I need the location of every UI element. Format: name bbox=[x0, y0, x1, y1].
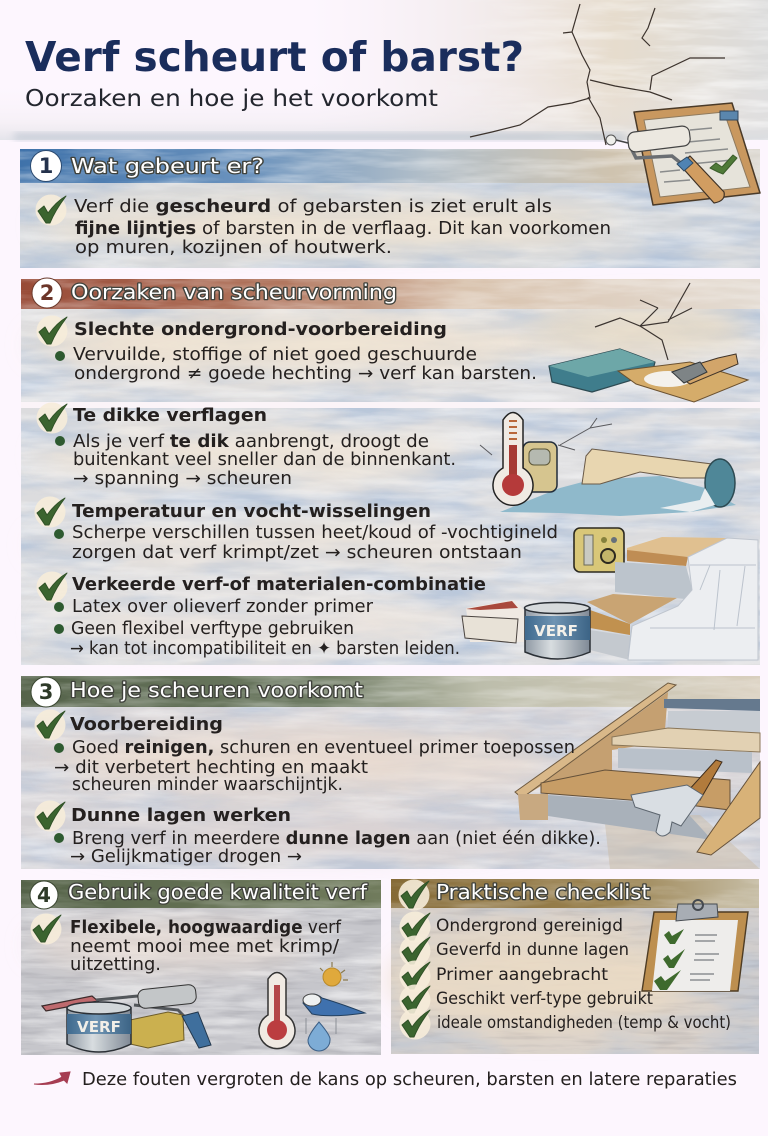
cause 3: temperatuur en vocht: zorgen dat verf krimpt/zet → scheuren ontstaan bbox=[72, 543, 522, 563]
checklist items: Ondergrond gereinigd bbox=[436, 916, 623, 935]
cause 1: slechte ondergrond: Slechte ondergrond-voorbereiding bbox=[74, 320, 447, 340]
cause 4: verkeerde materialen: Verkeerde verf-of materialen-combinatie bbox=[72, 575, 486, 595]
cause 1: slechte ondergrond: Vervuilde, stoffige of niet goed geschuurde bbox=[73, 345, 477, 365]
cause 3: temperatuur en vocht: Scherpe verschillen tussen heet/koud of -vochtigineld bbox=[72, 523, 558, 543]
panel 1: wat gebeurt er bbox=[20, 103, 760, 268]
cause 4: verkeerde materialen: → kan tot incompatibiliteit en ✦ barsten leiden. bbox=[70, 639, 460, 659]
heading 1: Wat gebeurt er? bbox=[71, 154, 264, 178]
icon: hygrometer bbox=[574, 528, 624, 572]
icon: stairs with drop cloth bbox=[587, 537, 758, 660]
flexible paint text: uitzetting. bbox=[70, 955, 161, 975]
icon: stairs with paint brush bbox=[515, 683, 760, 869]
number badge 4 bbox=[30, 881, 58, 909]
cause 1: slechte ondergrond: ondergrond ≠ goede hechting → verf kan barsten. bbox=[74, 364, 537, 384]
checklist badge bbox=[398, 880, 430, 910]
tip 2: dunne lagen: Dunne lagen werken bbox=[71, 806, 291, 826]
flexible paint text: neemt mooi mee met krimp/ bbox=[70, 937, 339, 957]
icon: clipboard with checks bbox=[642, 900, 748, 991]
footer note bbox=[34, 1070, 737, 1090]
icon: primer box and verf can bbox=[462, 600, 590, 659]
icon: thermometer, device, roll and spill bbox=[480, 412, 736, 516]
body text: fijne lijntjes of barsten in de verflaag. Dit kan voorkomen bbox=[75, 219, 611, 239]
heading 3: Hoe je scheuren voorkomt bbox=[70, 678, 363, 702]
flexible paint text bbox=[70, 918, 342, 975]
icon: thermometer and weather bbox=[259, 962, 365, 1051]
body text: op muren, kozijnen of houtwerk. bbox=[75, 238, 392, 258]
number badge 2 bbox=[32, 278, 62, 308]
title: Verf scheurt of barst? bbox=[25, 33, 524, 81]
tip 2: dunne lagen bbox=[34, 800, 601, 867]
checklist items bbox=[400, 912, 731, 1040]
tip 1: voorbereiding: Voorbereiding bbox=[70, 715, 223, 735]
header wash with cracks bbox=[0, 0, 768, 145]
number badge 3 bbox=[31, 677, 61, 707]
number badge 3: 3 bbox=[39, 680, 53, 704]
panel 3: hoe je scheuren voorkomt bbox=[21, 676, 760, 869]
flexible paint text: Flexibele, hoogwaardige verf bbox=[70, 918, 342, 938]
icon: can, roller and sponge bbox=[42, 984, 211, 1052]
tip 1: voorbereiding: → dit verbetert hechting en maakt bbox=[54, 758, 368, 778]
heading 4: Gebruik goede kwaliteit verf bbox=[68, 880, 368, 904]
check icon bbox=[30, 914, 62, 944]
checklist heading: Praktische checklist bbox=[436, 880, 650, 904]
checklist items: Geverfd in dunne lagen bbox=[436, 940, 629, 959]
check icon bbox=[36, 194, 66, 226]
body text: Verf die gescheurd of gebarsten is ziet erult als bbox=[74, 197, 552, 217]
body text bbox=[74, 197, 611, 258]
tip 1: voorbereiding: Goed reinigen, schuren en eventueel primer toepossen bbox=[72, 738, 575, 758]
checklist items: Geschikt verf-type gebruikt bbox=[436, 989, 654, 1008]
cause 2: te dikke verflagen: → spanning → scheuren bbox=[73, 469, 292, 489]
cause 4: verkeerde materialen: Geen flexibel verftype gebruiken bbox=[71, 619, 354, 639]
icon: clipboard and paint roller bbox=[606, 103, 760, 205]
subtitle: Oorzaken en hoe je het voorkomt bbox=[25, 86, 438, 112]
panel 2: oorzaken bbox=[21, 278, 760, 665]
number badge 2: 2 bbox=[40, 281, 54, 305]
cause 4: verkeerde materialen bbox=[36, 572, 486, 659]
arrow bbox=[34, 1072, 70, 1084]
tip 1: voorbereiding bbox=[34, 710, 575, 795]
cause 3: temperatuur en vocht: Temperatuur en vocht-wisselingen bbox=[72, 502, 431, 522]
cause 2: te dikke verflagen: Als je verf te dik aanbrengt, droogt de bbox=[73, 432, 429, 452]
heading 2: Oorzaken van scheurvorming bbox=[71, 280, 397, 304]
cause 2: te dikke verflagen: buitenkant veel sneller dan de binnenkant. bbox=[73, 450, 456, 470]
checklist items: Primer aangebracht bbox=[436, 965, 609, 984]
cause 3: temperatuur en vocht bbox=[34, 496, 558, 563]
cause 2: te dikke verflagen: Te dikke verflagen bbox=[73, 406, 267, 426]
cause 4: verkeerde materialen: Latex over olieverf zonder primer bbox=[72, 597, 374, 617]
icon: primer box and verf can: VERF bbox=[534, 622, 578, 640]
panel 4: gebruik goede kwaliteit verf bbox=[21, 880, 381, 1055]
number badge 1 bbox=[30, 150, 62, 182]
tip 2: dunne lagen: → Gelijkmatiger drogen → bbox=[70, 847, 302, 867]
number badge 1: 1 bbox=[39, 154, 53, 178]
panel: praktische checklist bbox=[390, 879, 759, 1054]
tip 2: dunne lagen: Breng verf in meerdere dunne lagen aan (niet één dikke). bbox=[72, 829, 601, 849]
footer text: Deze fouten vergroten de kans op scheuren, barsten en latere reparaties bbox=[82, 1070, 737, 1090]
icon: sponge, sandpaper and brush with crack bbox=[549, 283, 748, 402]
cause 2: te dikke verflagen bbox=[36, 402, 456, 489]
checklist items: ideale omstandigheden (temp & vocht) bbox=[437, 1013, 731, 1032]
icon: can, roller and sponge: VERF bbox=[77, 1018, 121, 1036]
cause 1: slechte ondergrond bbox=[36, 316, 537, 384]
number badge 4: 4 bbox=[37, 883, 51, 907]
tip 1: voorbereiding: scheuren minder waarschijntjk. bbox=[72, 775, 343, 795]
